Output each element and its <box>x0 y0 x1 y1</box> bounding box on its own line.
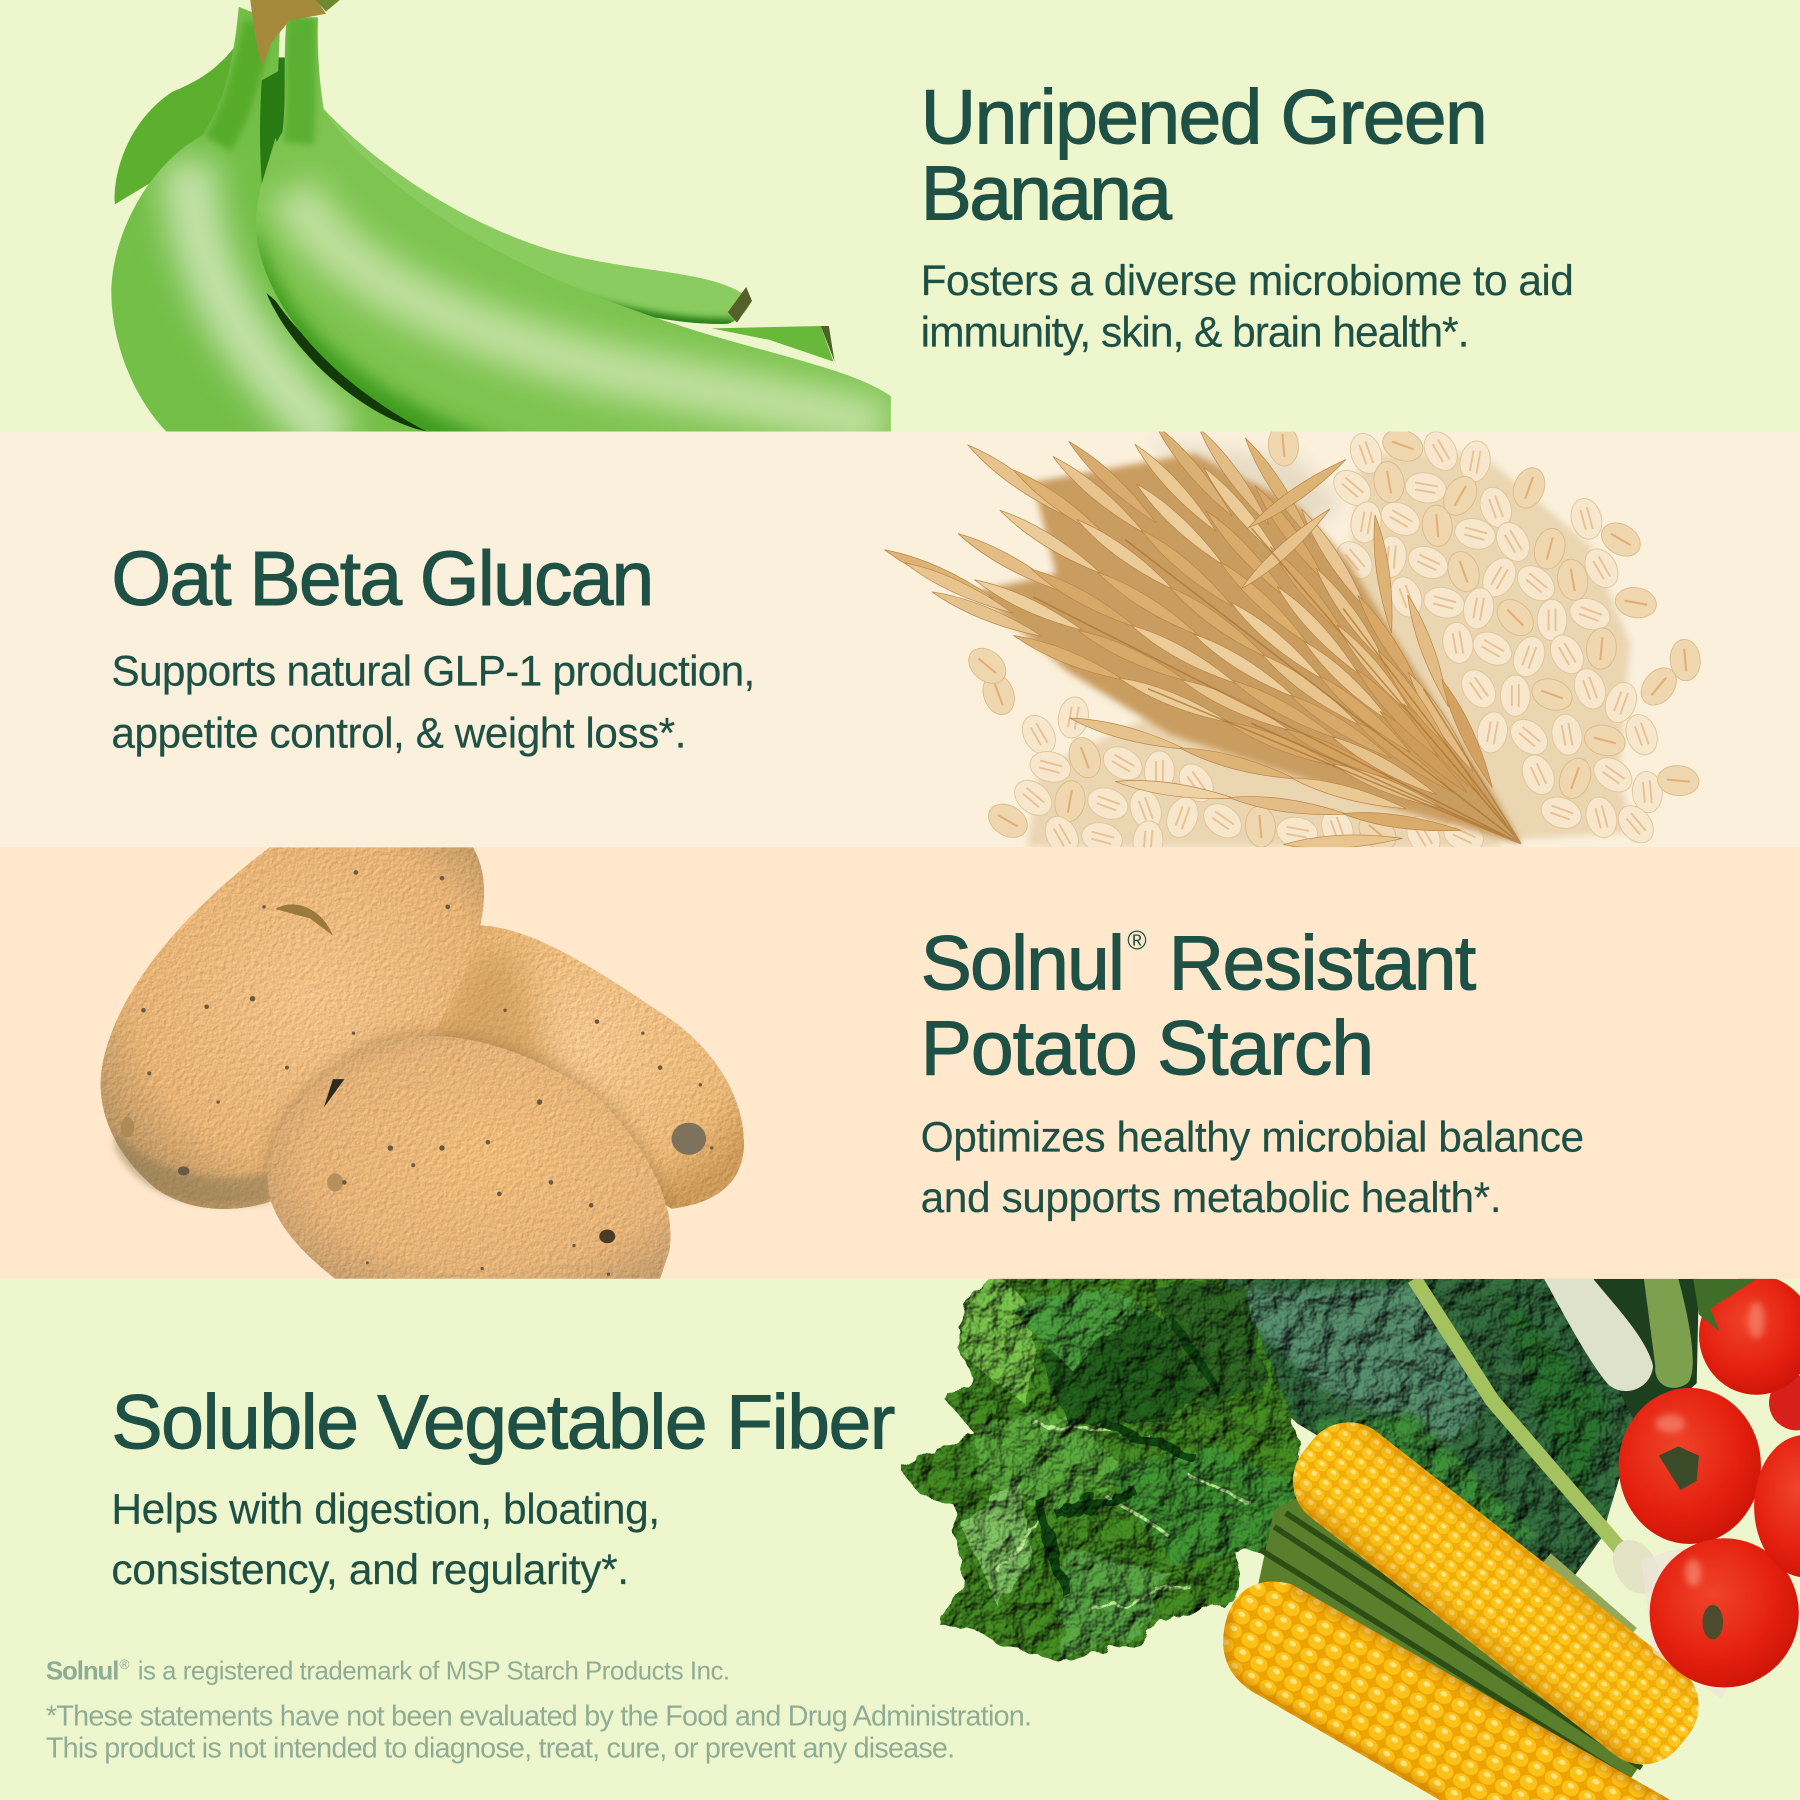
text: banana benefit: immunity, skin, & brain health*. <box>921 309 1469 356</box>
heading: solnul resistant potato starch: Potato Starch <box>921 1005 1374 1091</box>
text: oat benefit: appetite control, & weight loss*. <box>111 709 686 756</box>
panel: soluble vegetable fiber <box>0 1274 1800 1800</box>
text: oat benefit <box>111 647 755 756</box>
text: trademark note: ® <box>119 1657 130 1672</box>
illustration: vegetables <box>901 1274 1800 1800</box>
panel: green banana <box>111 0 1572 432</box>
heading: oat beta glucan: Oat Beta Glucan <box>111 536 654 622</box>
panel: potato starch <box>0 847 1800 1279</box>
panel: oat beta glucan <box>0 421 1800 863</box>
heading: unripened green banana: Unripened Green <box>921 74 1488 160</box>
heading: solnul resistant potato starch: ® <box>1127 925 1147 955</box>
heading: solnul resistant potato starch: Resistant <box>1169 921 1476 1007</box>
text: FDA disclaimer <box>46 1700 1032 1765</box>
text: potato starch benefit <box>921 1113 1584 1221</box>
heading: unripened green banana <box>921 74 1488 236</box>
text: potato starch benefit: Optimizes healthy microbial balance <box>921 1113 1584 1160</box>
illustration: lettuce <box>901 1274 1303 1665</box>
illustration: corn ear upper <box>1292 1422 1699 1764</box>
text: oat benefit: Supports natural GLP-1 production, <box>111 647 755 694</box>
illustration: green bananas <box>111 0 891 453</box>
text: FDA disclaimer: *These statements have not been evaluated by the Food and Drug Administration. <box>46 1700 1032 1732</box>
illustration: oats and oat stalks <box>882 421 1702 863</box>
text: trademark note: Solnul <box>46 1657 119 1685</box>
illustration: tomatoes <box>1619 1275 1800 1699</box>
text: fiber benefit: Helps with digestion, bloating, <box>111 1485 660 1532</box>
illustration: potatoes <box>101 847 744 1279</box>
illustration: corn husk <box>1257 1492 1659 1779</box>
heading: solnul resistant potato starch: Solnul <box>921 921 1125 1007</box>
heading: soluble vegetable fiber: Soluble Vegetable Fiber <box>111 1380 895 1466</box>
text: banana benefit: Fosters a diverse microbiome to aid <box>921 257 1574 304</box>
text: fiber benefit: consistency, and regularity*. <box>111 1546 629 1593</box>
text: fiber benefit <box>111 1485 660 1593</box>
illustration: corn ear lower <box>1223 1582 1670 1800</box>
heading: solnul resistant potato starch <box>921 921 1476 1091</box>
text: potato starch benefit: and supports metabolic health*. <box>921 1174 1502 1221</box>
text: banana benefit <box>921 257 1574 356</box>
heading: unripened green banana: Banana <box>921 150 1172 236</box>
text: trademark note: is a registered trademark of MSP Starch Products Inc. <box>138 1657 730 1685</box>
text: FDA disclaimer: This product is not intended to diagnose, treat, cure, or prevent any disease. <box>46 1733 955 1765</box>
